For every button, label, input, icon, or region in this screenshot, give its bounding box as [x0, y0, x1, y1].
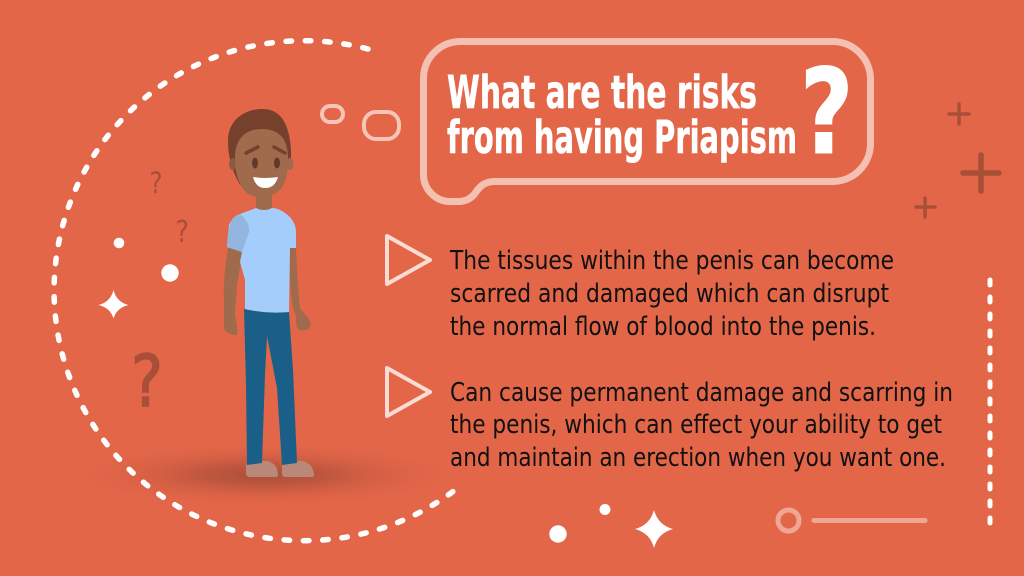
neck [256, 190, 272, 211]
hair [228, 109, 291, 185]
decorative question marks: ? [176, 214, 189, 250]
trousers [244, 309, 297, 465]
bullet arrow one [387, 236, 430, 284]
small speech outlines [322, 106, 399, 139]
dashed vertical line [988, 280, 992, 525]
text block one: The tissues within the penis can become [449, 246, 894, 276]
text block two: the penis, which can effect your ability to get [450, 410, 942, 440]
text block two [450, 378, 953, 473]
text block one: scarred and damaged which can disrupt [450, 279, 889, 309]
plus signs [916, 104, 999, 217]
eyes [252, 158, 258, 168]
face [235, 129, 288, 197]
decorative dots and sparkles left [98, 238, 179, 318]
decorative question marks: ? [131, 340, 163, 423]
smile [253, 177, 278, 188]
ears [229, 158, 237, 170]
title: What are the risks [447, 66, 757, 119]
arms [224, 248, 243, 335]
text block one: the normal flow of blood into the penis. [450, 312, 876, 342]
t-shirt [227, 208, 296, 313]
slider decoration [778, 510, 925, 531]
sleeve [227, 214, 249, 252]
title [447, 66, 797, 164]
character shadow [60, 441, 470, 509]
question mark: ? [800, 44, 853, 181]
decorative question marks: ? [150, 167, 163, 201]
text block one [449, 246, 894, 342]
title speech bubble [424, 41, 871, 201]
decorative question marks [131, 167, 189, 423]
eyebrows [246, 147, 285, 153]
shoes [246, 461, 278, 477]
title: from having Priapism [447, 111, 797, 164]
dashed circle arc [54, 41, 455, 541]
character [224, 109, 314, 477]
bullet arrow two [387, 368, 430, 416]
decorative dots and sparkle bottom [549, 504, 673, 548]
